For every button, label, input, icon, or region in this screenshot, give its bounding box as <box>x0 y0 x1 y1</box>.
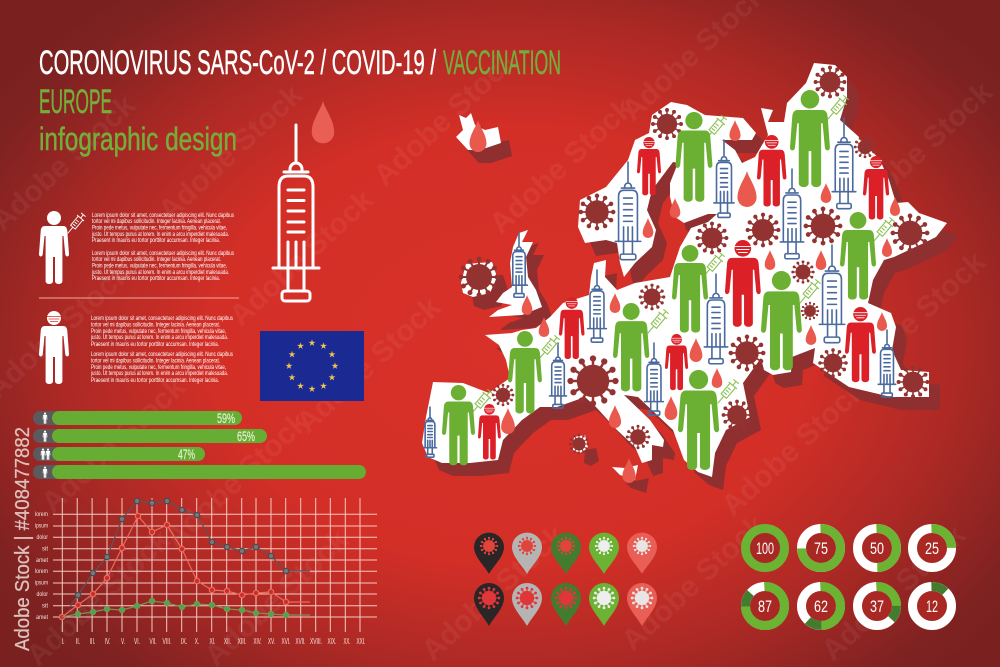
y axis labels: dolor <box>36 591 49 598</box>
bar: full <box>33 465 366 479</box>
donut: 50: 50 <box>870 539 884 558</box>
x axis labels: XVIII. <box>310 636 322 646</box>
x axis labels: XV. <box>268 636 275 646</box>
green people <box>442 90 876 470</box>
pins: first row <box>474 533 657 574</box>
x axis labels: III. <box>90 636 96 646</box>
donut: 12 <box>912 586 952 626</box>
watermark pattern: Adobe Stock <box>835 245 992 395</box>
y axis labels: lorem <box>35 511 48 518</box>
map pins <box>474 533 657 626</box>
donut: 75: 75 <box>814 539 828 558</box>
x axis labels: XVII. <box>296 636 306 646</box>
bar chart: percentages <box>33 410 366 479</box>
text block: first: Proin pede metus, vulputate nec, fermentum fringilla, vehicula vitae, <box>92 226 227 232</box>
series: green <box>62 598 310 618</box>
text block: first: Praesent in mauris eu tortor porttitor accumsan. Integer lacinia. <box>92 238 220 244</box>
y axis labels: lorem <box>35 568 48 575</box>
x axis labels: XII. <box>224 636 231 646</box>
donut charts <box>746 528 952 626</box>
donut: 37 <box>858 586 896 626</box>
text block: first: tortor vel mi dapibus sollicitudin. Integer lacinia. Aenean placerat. <box>92 257 221 263</box>
watermark pattern: Adobe Stock <box>35 370 192 520</box>
map land <box>422 63 947 480</box>
x axis labels: I. <box>62 636 64 646</box>
text block: first: Praesent in mauris eu tortor porttitor accumsan. Integer lacinia. <box>92 276 220 282</box>
donut: 37: 37 <box>870 597 884 616</box>
watermark pattern: Adobe Stock <box>158 405 315 555</box>
text block: second: Lorem ipsum dolor sit amet, consectetuer adipiscing elit. Nunc dapibus <box>91 316 233 322</box>
x axis labels: XIII. <box>238 636 246 646</box>
x axis labels: XX. <box>344 636 350 646</box>
donut: 62: 62 <box>814 597 828 616</box>
text block: second: tortor vel mi dapibus sollicitudin. Integer lacinia. Aenean placerat. <box>91 322 220 328</box>
watermark pattern: Adobe Stock <box>815 518 972 667</box>
icon: blood drop <box>312 101 334 143</box>
x axis labels: V. <box>121 636 125 646</box>
watermark pattern: Adobe Stock <box>223 183 380 333</box>
icon: person with face mask <box>39 311 69 384</box>
text block: second: Lorem ipsum dolor sit amet, consectetuer adipiscing elit. Nunc dapibus <box>91 352 233 358</box>
small green syringes <box>468 94 896 416</box>
x axis labels: XVI. <box>282 636 290 646</box>
title line: coronavirus: CORONOVIRUS SARS-CoV-2 / COVID-19 / <box>39 44 436 82</box>
text block: second: Proin pede metus, vulputate nec, fermentum fringilla, vehicula vitae, <box>91 365 226 371</box>
text block: first <box>91 213 234 282</box>
donut: 50 <box>858 528 896 568</box>
x axis labels: VII. <box>150 636 156 646</box>
watermark pattern: Adobe Stock <box>842 75 999 225</box>
bar: 65% <box>33 428 267 444</box>
text block: second: justo. Ut tempus purus at lorem. In enim a arcu imperdiet malesuada. <box>90 371 228 377</box>
text block: second: tortor vel mi dapibus sollicitudin. Integer lacinia. Aenean placerat. <box>91 358 220 364</box>
donut: 62 <box>802 586 840 626</box>
y axis labels: ipsum <box>35 580 48 586</box>
pins: second row <box>474 583 657 626</box>
x axis labels: XXI. <box>356 636 366 646</box>
watermark pattern: Adobe Stock <box>290 290 447 440</box>
vertical stock id: Adobe Stock | #408477882 <box>12 427 34 651</box>
watermark pattern: Adobe Stock <box>715 373 872 523</box>
watermark pattern: Adobe Stock <box>367 43 524 193</box>
blue syringes <box>423 118 896 457</box>
donut: 75 <box>802 528 840 568</box>
text block: second: justo. Ut tempus purus at lorem. In enim a arcu imperdiet malesuada. <box>90 335 228 341</box>
bar: 59% <box>33 410 242 426</box>
text block: first: justo. Ut tempus purus at lorem. In enim a arcu imperdiet malesuada. <box>91 232 229 238</box>
map shadow <box>433 76 958 493</box>
blood drops <box>470 120 900 483</box>
bar: 47% <box>33 446 205 462</box>
text block: first: Lorem ipsum dolor sit amet, consectetuer adipiscing elit. Nunc dapibus <box>92 213 234 219</box>
x axis labels: XIX. <box>328 636 336 646</box>
icon: large syringe <box>273 125 319 301</box>
series: grey <box>70 498 310 607</box>
text block: first: justo. Ut tempus purus at lorem. In enim a arcu imperdiet malesuada. <box>91 270 229 276</box>
y axis labels <box>35 511 49 621</box>
viruses <box>461 68 927 453</box>
donut: 25: 25 <box>925 539 939 558</box>
title word: vaccination: VACCINATION <box>443 44 561 82</box>
text block: second: Proin pede metus, vulputate nec, fermentum fringilla, vehicula vitae, <box>91 329 226 335</box>
y axis labels: dolor <box>36 534 49 541</box>
EU flag <box>260 331 364 401</box>
watermark pattern: Adobe Stock <box>615 508 772 658</box>
text block: second <box>90 316 233 384</box>
y axis labels: amet <box>36 557 48 564</box>
text block: second: Praesent in mauris eu tortor porttitor accumsan. Integer lacinia. <box>91 378 219 384</box>
bar: 65%: 65% <box>237 428 255 444</box>
y axis labels: sit <box>42 546 48 552</box>
text block: first: Proin pede metus, vulputate nec, fermentum fringilla, vehicula vitae, <box>92 264 227 270</box>
watermark pattern: Adobe Stock <box>483 91 640 241</box>
x axis labels <box>62 636 366 646</box>
donut: 100: 100 <box>756 539 774 558</box>
bar: 59%: 59% <box>217 410 235 426</box>
subtitle: europe: EUROPE <box>39 83 112 121</box>
donut: 25 <box>912 528 952 568</box>
subtitle: infographic design: infographic design <box>39 121 237 157</box>
watermark pattern: Adobe Stock <box>152 78 309 228</box>
icon: vaccinated person with syringe <box>39 211 87 284</box>
bar: 47%: 47% <box>178 446 195 462</box>
x axis labels: VIII. <box>162 636 172 646</box>
title <box>39 44 561 157</box>
text block: second: Praesent in mauris eu tortor porttitor accumsan. Integer lacinia. <box>91 342 219 348</box>
donut: 87: 87 <box>758 597 772 616</box>
series: red <box>59 513 310 620</box>
donut: 87 <box>746 586 784 626</box>
y axis labels: amet <box>36 614 48 621</box>
y axis labels: ipsum <box>35 522 48 530</box>
watermark pattern: Adobe Stock <box>415 518 572 667</box>
text block: first: Lorem ipsum dolor sit amet, consectetuer adipiscing elit. Nunc dapibus <box>92 251 234 257</box>
text block: first: tortor vel mi dapibus sollicitudin. Integer lacinia. Aenean placerat. <box>92 219 221 225</box>
x axis labels: XIV. <box>254 636 262 646</box>
line chart <box>35 498 377 646</box>
red masked people <box>478 135 889 459</box>
y axis labels: sit <box>42 602 48 610</box>
donut: 12: 12 <box>926 597 938 616</box>
donut: 100 <box>746 528 784 568</box>
x axis labels: VI. <box>134 636 140 646</box>
x axis labels: II. <box>76 636 80 646</box>
x axis labels: XI. <box>210 636 216 646</box>
x axis labels: IV. <box>104 636 110 646</box>
map of Europe <box>422 63 958 493</box>
x axis labels: X. <box>195 636 199 646</box>
x axis labels: IX. <box>180 636 188 646</box>
